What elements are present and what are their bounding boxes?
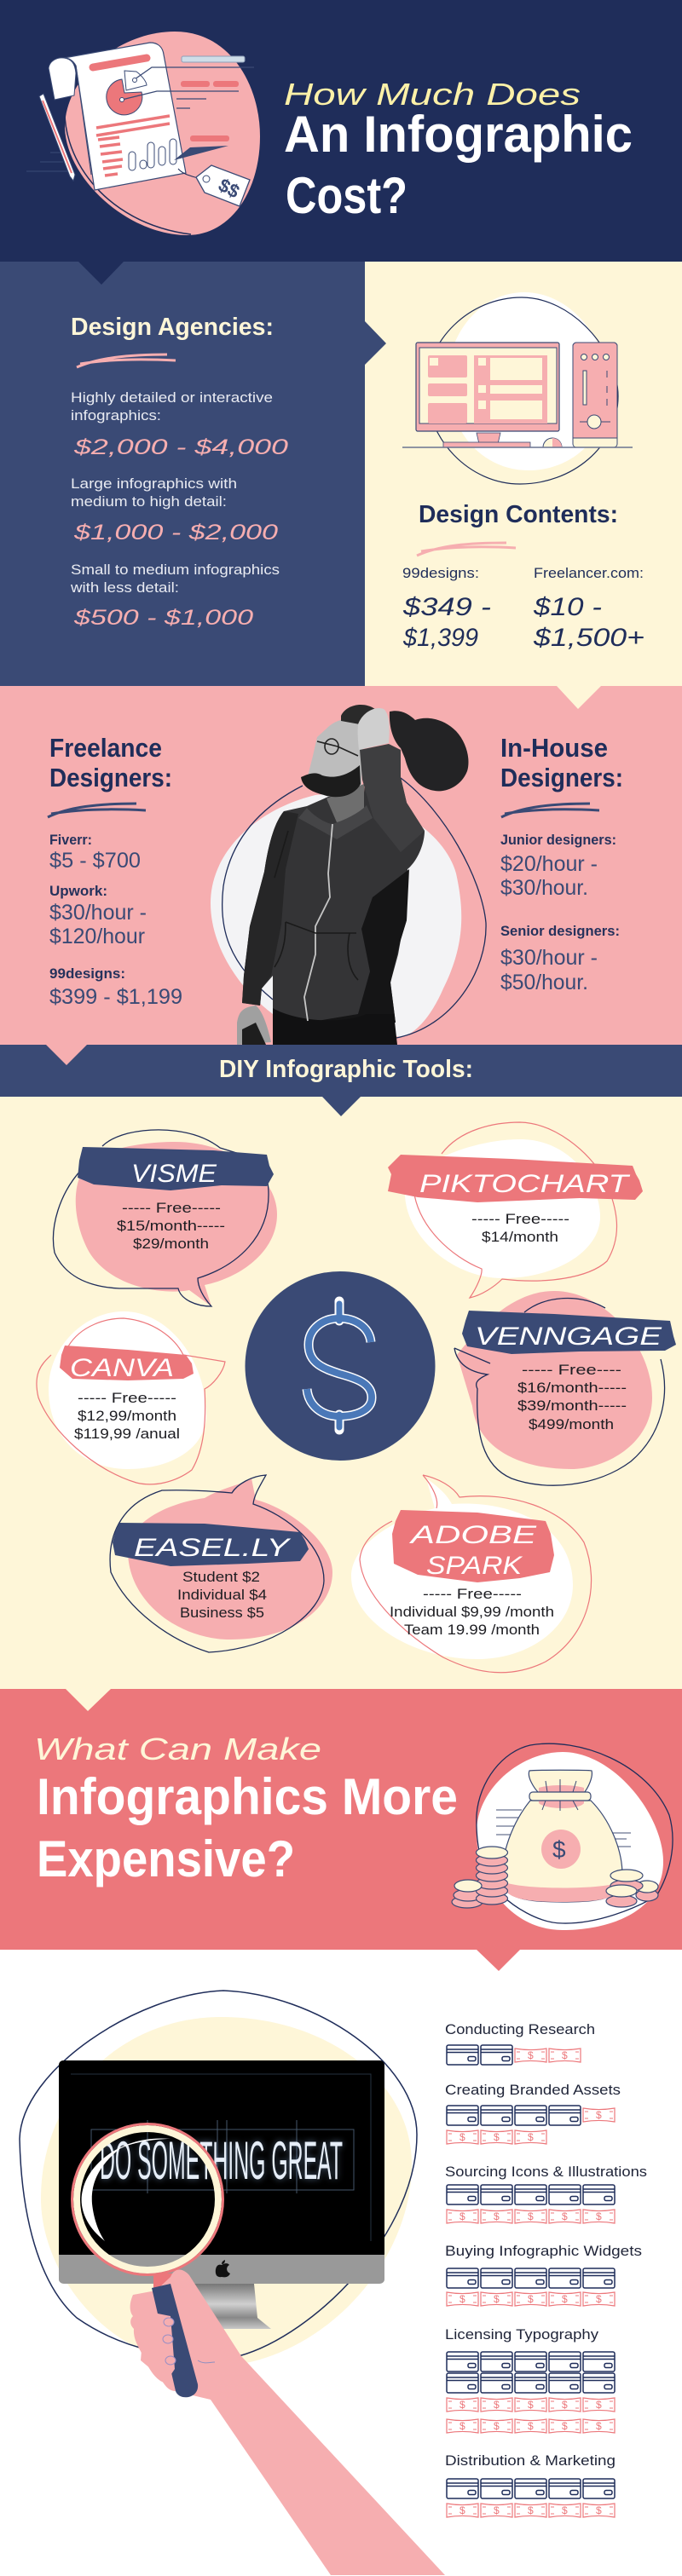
bubble: Piktochart [388, 1122, 643, 1298]
cost list: distribution and marketing: Distribution & Marketing [445, 2452, 616, 2469]
title: How Much Does [284, 77, 581, 112]
panel: design contests [365, 262, 682, 686]
title: An Infographic [284, 106, 633, 163]
text: freelance designers: $399 - $1,199 [49, 985, 182, 1009]
text: in-house designers [500, 733, 623, 994]
heading: design agencies: Design Agencies: [71, 314, 274, 341]
heading band: DIY infographic tools: DIY Infographic Tools: [219, 1056, 473, 1083]
section: header [0, 0, 682, 262]
text: agency prices: Large infographics with [71, 475, 237, 492]
bubble: Adobe Spark: Individual $9,99 /month [390, 1604, 554, 1620]
text: in-house designers: $30/hour. [500, 876, 588, 900]
icon: hand and arm [130, 2270, 445, 2575]
bubble: Piktochart: PIKTOCHART [419, 1170, 631, 1198]
text: freelance designers: Freelance [49, 733, 162, 763]
illustration: money bag and coins [452, 1743, 673, 1930]
heading: what can make: What Can Make [34, 1732, 321, 1766]
icon: central dollar coin [246, 1271, 435, 1461]
text: in-house designers: In-House [500, 733, 608, 763]
text: in-house designers: Senior designers: [500, 923, 620, 939]
text: agency prices: $500 - $1,000 [73, 606, 253, 630]
cost list: sourcing icons and illustrations [445, 2164, 647, 2223]
bubble: Venngage [454, 1291, 676, 1485]
cost list: distribution and marketing: $$$$$ [459, 2504, 602, 2516]
heading: what can make: Expensive? [37, 1830, 295, 1887]
icon: dollar on bag: $ [552, 1836, 566, 1863]
cost list: creating branded assets: Creating Branded Assets [445, 2082, 621, 2098]
text: freelance designers: $5 - $700 [49, 849, 141, 873]
cost list: sourcing icons and illustrations: $$$$$ [459, 2210, 602, 2222]
text: freelancer prices [533, 565, 644, 652]
text: freelance designers: Fiverr: [49, 832, 92, 848]
text: freelancer prices: $10 - [533, 593, 602, 621]
text: in-house designers: Designers: [500, 763, 623, 792]
text: agency prices: Highly detailed or interactive [71, 389, 273, 406]
cost list: buying infographic widgets [445, 2243, 642, 2306]
title [284, 77, 633, 224]
bubble: Easel.ly: Individual $4 [177, 1587, 267, 1603]
cost list: buying infographic widgets: $$$$$ [459, 2293, 602, 2305]
text: freelance designers: 99designs: [49, 965, 125, 982]
text: freelance designers [48, 733, 182, 1009]
bubble: Visme: $15/month----- [117, 1218, 225, 1234]
text: agency prices: $1,000 - $2,000 [73, 521, 278, 545]
bubble: Venngage: ----- Free---- [522, 1362, 621, 1378]
text: agency prices: infographics: [71, 407, 161, 424]
icon: apple logo [216, 2260, 230, 2277]
bubble: Easel.ly: Business $5 [180, 1605, 264, 1621]
bubble: Canva [37, 1311, 225, 1484]
cost list: creating branded assets [445, 2082, 621, 2144]
text: 99designs prices: 99designs: [402, 565, 479, 581]
illustration: hand with magnifier over monitor [20, 1991, 445, 2575]
bubble: Piktochart: ----- Free----- [471, 1211, 569, 1227]
cost list: licensing typography: $$$$$ [459, 2399, 602, 2411]
panel: DIY tools background [0, 1097, 682, 1689]
panel: design agencies [0, 262, 386, 686]
text: in-house designers: Junior designers: [500, 832, 616, 848]
illustration: man holding cap [211, 705, 486, 1045]
bubble: Adobe Spark [351, 1475, 592, 1673]
text: in-house designers: $30/hour - [500, 946, 598, 970]
heading band: DIY infographic tools [0, 1045, 682, 1116]
cost list: sourcing icons and illustrations: Sourcing Icons & Illustrations [445, 2164, 647, 2180]
cost list: conducting research [445, 2021, 595, 2065]
bubble: Easel.ly [110, 1475, 332, 1652]
cost list: buying infographic widgets: Buying Infographic Widgets [445, 2243, 642, 2259]
panel: designers [0, 686, 682, 1045]
bubble: Visme: VISME [131, 1160, 217, 1188]
cost list: licensing typography: $$$$$ [459, 2420, 602, 2432]
illustration: desktop computer [402, 292, 633, 484]
title: Cost? [286, 167, 407, 224]
text: agency prices [70, 389, 288, 630]
text: freelance designers: Upwork: [49, 883, 107, 899]
bubble: Visme: ----- Free----- [122, 1200, 221, 1216]
text: agency prices: with less detail: [70, 579, 179, 596]
section: what makes infographics expensive [0, 1689, 682, 1971]
text: agency prices: medium to high detail: [71, 493, 227, 510]
text: in-house designers: $50/hour. [500, 971, 588, 994]
bubble: Canva: CANVA [70, 1354, 174, 1382]
bubble: Adobe Spark: ----- Free----- [423, 1586, 522, 1602]
cost list: conducting research: $$ [528, 2049, 568, 2061]
cost list: creating branded assets: $$$ [459, 2131, 534, 2143]
bubble: Easel.ly: EASEL.LY [134, 1534, 292, 1562]
bubble: Adobe Spark: ADOBE [408, 1521, 537, 1549]
text: freelance designers: $30/hour - [49, 901, 147, 925]
cost list: conducting research: Conducting Research [445, 2021, 595, 2037]
heading: design contests: Design Contents: [419, 501, 618, 528]
text: freelancer prices: $1,500+ [533, 624, 644, 652]
text: 99designs prices: $349 - [402, 593, 491, 621]
heading: what can make [34, 1732, 458, 1887]
cost list: distribution and marketing [445, 2452, 616, 2517]
icon: dollar on price tag: $$ [215, 174, 243, 203]
text: 99designs prices: $1,399 [402, 624, 478, 652]
bubble: Visme: $29/month [133, 1236, 209, 1252]
neon sign text [100, 2131, 343, 2191]
bubble: Canva: $119,99 /anual [74, 1426, 180, 1442]
cost list: licensing typography [445, 2326, 615, 2433]
text: freelance designers: $120/hour [49, 925, 145, 948]
text: freelancer prices: Freelancer.com: [534, 565, 644, 581]
icon: magnifying glass [72, 2124, 223, 2289]
cost list: licensing typography: Licensing Typography [445, 2326, 599, 2343]
bubble: Adobe Spark: SPARK [426, 1552, 523, 1580]
bubble: Canva: ----- Free----- [78, 1390, 176, 1406]
illustration: priced document [26, 32, 260, 235]
text: agency prices: Small to medium infographics [71, 562, 280, 578]
bubble: Venngage: $499/month [529, 1416, 614, 1432]
bubble: Venngage: $39/month----- [517, 1397, 627, 1414]
text: agency prices: $2,000 - $4,000 [73, 435, 288, 459]
cost list: creating branded assets: $ [596, 2109, 602, 2121]
bubble: Venngage: $16/month----- [517, 1380, 627, 1396]
heading: what can make: Infographics More [37, 1768, 458, 1825]
bubble: Easel.ly: Student $2 [182, 1569, 260, 1585]
text: in-house designers: $20/hour - [500, 852, 598, 876]
bubble: Adobe Spark: Team 19.99 /month [404, 1622, 540, 1638]
bubble: Visme [53, 1130, 277, 1306]
text: 99designs prices [402, 565, 491, 652]
bubble: Piktochart: $14/month [482, 1229, 558, 1245]
text: freelance designers: Designers: [49, 763, 172, 792]
bubble: Canva: $12,99/month [78, 1408, 176, 1424]
bubble: Venngage: VENNGAGE [475, 1323, 662, 1351]
